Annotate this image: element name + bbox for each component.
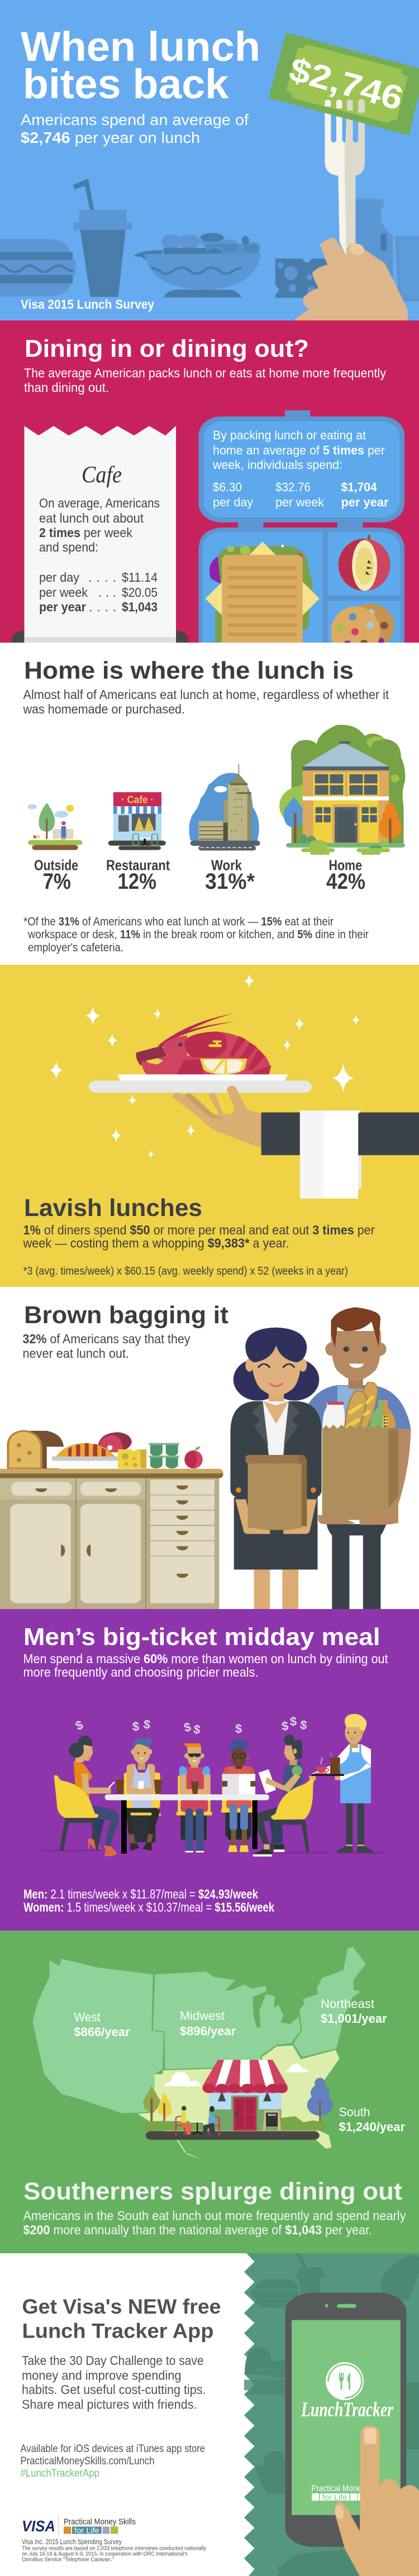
body text: [23, 1223, 375, 1251]
region: midwest: $896/year: [180, 2024, 236, 2038]
stat: outside: Outside: [34, 856, 78, 873]
spend comparison: [23, 1887, 274, 1914]
icon: hand tapping: [334, 2426, 419, 2576]
lunchbox lid text: home an average of 5 times per: [213, 443, 385, 457]
heading: Dining in or dining out?: [25, 335, 309, 362]
subtitle: [21, 111, 249, 146]
icon: dollar signs: $: [142, 1717, 151, 1732]
icon: dollar signs: [73, 1715, 308, 1737]
receipt text: . . .: [98, 585, 116, 600]
intro text: than dining out.: [24, 380, 109, 395]
footnote: employer's cafeteria.: [28, 941, 123, 954]
icon: dollar signs: $: [183, 1720, 192, 1735]
footnote: *Of the 31% of Americans who eat lunch at work — 15% eat at their: [23, 916, 334, 928]
region: south: [339, 2105, 405, 2134]
source note: [22, 2538, 207, 2563]
phone brand text: Practical Mone: [312, 2484, 361, 2493]
heading: Southerners splurge dining out: [23, 2177, 402, 2205]
stat: home: 42%: [326, 869, 365, 894]
intro text: [24, 366, 386, 395]
illustration: diners left: [42, 1736, 212, 1856]
region: northeast: [321, 1996, 387, 2026]
heading: Get Visa's NEW free: [22, 2295, 221, 2318]
panel: home is where the lunch is: [0, 643, 419, 965]
icon: groceries on counter: [8, 1431, 203, 1469]
footnote: workspace or desk, 11% in the break room or kitchen, and 5% dine in their: [27, 928, 369, 941]
spend comparison: Men: 2.1 times/week x $11.87/meal = $24.93/week: [23, 1887, 258, 1902]
region: west: [74, 2010, 130, 2039]
heading: Men’s big-ticket midday meal: [23, 1624, 380, 1650]
bill amount: $2,746: [285, 50, 407, 117]
lunchbox lid text: [212, 428, 389, 509]
heading: [22, 2295, 221, 2343]
icon: dollar signs: $: [281, 1718, 289, 1734]
stat: work: 31%*: [205, 869, 255, 894]
panel: men's midday meal: [0, 1609, 419, 1931]
footnote: [23, 916, 369, 954]
stat: outside: 7%: [42, 869, 71, 894]
cafe sign: · Cafe ·: [121, 794, 154, 805]
region: west: $866/year: [74, 2025, 130, 2039]
body text: 1% of diners spend $50 or more per meal and eat out 3 times per: [23, 1223, 375, 1237]
region: northeast: Northeast: [321, 1996, 374, 2011]
icon: lobster on tray: [89, 1014, 312, 1093]
availability text: PracticalMoneySkills.com/Lunch: [20, 2455, 154, 2467]
icon: kitchen counter: [0, 1469, 223, 1610]
icon: fork tips and hand: [294, 99, 408, 320]
intro text: Almost half of Americans eat lunch at home, regardless of whether it: [23, 687, 389, 702]
icon: dollar signs: $: [192, 1722, 202, 1737]
app logo: [326, 2362, 364, 2400]
body text: [23, 2209, 406, 2237]
lunchbox lid text: $6.30: [213, 480, 242, 494]
source note: Visa Inc. 2015 Lunch Spending Survey: [22, 2538, 122, 2546]
intro text: [23, 687, 389, 716]
receipt text: $11.14: [122, 570, 158, 585]
Visa logo: for Life: [74, 2526, 99, 2535]
illustration: diners right and waiter: [221, 1714, 388, 1856]
table: [105, 1794, 269, 1854]
panel: hero: [0, 0, 419, 321]
icon: restaurant: [108, 792, 166, 850]
body text: money and improve spending: [22, 2368, 181, 2383]
body text: week — costing them a whopping $9,383* a year.: [23, 1236, 289, 1251]
body text: [22, 1332, 191, 1361]
illustration: woman with paper bag: [230, 1328, 322, 1610]
Visa logo: VISA: [22, 2517, 55, 2535]
source line: Visa 2015 Lunch Survey: [21, 297, 154, 312]
phone: [285, 2292, 406, 2547]
heading: Brown bagging it: [24, 1301, 228, 1329]
source note: on July 16-19 & August 6-9, 2015, in cooperation with ORC International's: [22, 2550, 188, 2557]
heading: Home is where the lunch is: [24, 657, 354, 684]
icon: home: [279, 725, 405, 855]
receipt text: [39, 496, 160, 614]
subtitle: Americans spend an average of: [21, 111, 249, 128]
receipt text: On average, Americans: [39, 496, 160, 510]
body text: Take the 30 Day Challenge to save: [22, 2353, 203, 2368]
stat: restaurant: [106, 856, 170, 894]
Visa logo: Practical Money Skills: [64, 2517, 136, 2527]
region: midwest: Midwest: [180, 2009, 225, 2023]
source note: The survey results are based on 2,033 telephone interviews conducted nationally: [22, 2545, 207, 2551]
apple: [339, 535, 391, 591]
panel: brown bagging: [0, 1287, 419, 1610]
heading: Lunch Tracker App: [22, 2319, 213, 2343]
receipt text: per day: [39, 570, 79, 585]
receipt text: 2 times per week: [39, 525, 132, 540]
panel: lavish lunches: [0, 965, 419, 1287]
subtitle: $2,746 per year on lunch: [21, 129, 200, 146]
body text: more frequently and choosing pricier meals.: [23, 1665, 258, 1679]
stat: home: Home: [328, 856, 362, 873]
phone brand bar: for Life: [322, 2493, 347, 2502]
region: south: $1,240/year: [339, 2120, 405, 2134]
title: When lunch: [21, 23, 260, 70]
map of US regions: [32, 1947, 366, 2159]
body text: [22, 2353, 206, 2412]
body text: Men spend a massive 60% more than women on lunch by dining out: [23, 1651, 388, 1666]
Visa logo: [22, 2516, 136, 2536]
body text: Americans in the South eat lunch out more frequently and spend nearly: [23, 2209, 406, 2223]
body text: never eat lunch out.: [22, 1346, 129, 1361]
icon: dollar signs: $: [299, 1717, 308, 1732]
stat: restaurant: 12%: [117, 869, 156, 894]
receipt text: and spend:: [39, 540, 98, 554]
icon: dollar signs: $: [73, 1717, 85, 1733]
lunchbox lid text: per year: [341, 495, 389, 509]
icon: sparkles: [49, 974, 360, 1159]
illustration: man with grocery bag: [307, 1307, 411, 1610]
cafe script: Cafe: [82, 462, 122, 488]
lunchbox lid text: per day: [213, 495, 253, 509]
stat: restaurant: Restaurant: [106, 856, 170, 873]
footnote: *3 (avg. times/week) x $60.15 (avg. weekly spend) x 52 (weeks in a year): [23, 1265, 348, 1277]
panel: southerners splurge: [0, 1931, 419, 2253]
icon: outside: [27, 803, 82, 850]
icon: waiter hand and sleeve: [173, 1086, 419, 1199]
lunchbox: [199, 410, 404, 657]
icon: food silhouettes: [0, 179, 419, 310]
zigzag teal background with food silhouettes: [244, 2253, 419, 2576]
intro text: was homemade or purchased.: [23, 702, 185, 716]
body text: [23, 1651, 388, 1679]
phone brand bar: [312, 2493, 364, 2502]
region: south: South: [339, 2105, 370, 2119]
body text: 32% of Americans say that they: [22, 1332, 191, 1346]
intro text: The average American packs lunch or eats at home more frequently: [24, 366, 386, 380]
body text: Share meal pictures with friends.: [22, 2397, 197, 2412]
lunchbox lid text: week, individuals spend:: [212, 458, 342, 472]
panel: dining in or out: [0, 320, 419, 657]
receipt text: per year: [39, 600, 86, 614]
panel: lunch tracker app: [0, 2253, 419, 2576]
menu board text: MENU: [268, 2114, 277, 2117]
heading: Lavish lunches: [24, 1194, 202, 1222]
region: northeast: $1,001/year: [321, 2012, 387, 2026]
body text: $200 more annually than the national average of $1,043 per year.: [23, 2223, 372, 2237]
region: midwest: [180, 2009, 236, 2038]
lunchbox lid text: per week: [275, 495, 325, 509]
receipt text: . . . .: [88, 570, 116, 585]
receipt text: per week: [39, 585, 88, 600]
receipt text: $20.05: [122, 585, 158, 600]
sandwich: [205, 542, 320, 656]
lunchbox lid text: $1,704: [341, 480, 377, 494]
body text: habits. Get useful cost-cutting tips.: [22, 2382, 206, 2397]
lunchbox lid text: By packing lunch or eating at: [213, 428, 366, 442]
icon: work: [189, 764, 260, 851]
icon: restaurant scene: [143, 2060, 333, 2140]
region: west: West: [74, 2010, 101, 2024]
icon: dollar signs: $: [290, 1715, 297, 1728]
receipt text: . . . .: [89, 600, 116, 614]
stat: work: [205, 856, 255, 894]
availability text: [20, 2443, 205, 2479]
title line 2: bites back: [23, 61, 229, 107]
spend comparison: Women: 1.5 times/week x $10.37/meal = $15.56/week: [23, 1900, 274, 1914]
availability text: Available for iOS devices at iTunes app store: [20, 2443, 205, 2455]
icon: dollar signs: $: [235, 1722, 242, 1736]
source note: Omnibus Service “Telephone Caravan.”: [22, 2556, 114, 2563]
lunchbox lid text: $32.76: [275, 480, 311, 494]
icon: dollar signs: $: [132, 1720, 139, 1734]
receipt: [12, 426, 188, 643]
availability text: #LunchTrackerApp: [20, 2468, 99, 2479]
receipt text: eat lunch out about: [39, 511, 144, 525]
icon: fork with bill: [269, 32, 419, 275]
receipt text: $1,043: [122, 600, 158, 614]
stat: home: [326, 856, 365, 894]
stat: outside: [34, 856, 78, 894]
stat: work: Work: [211, 856, 242, 873]
cookies: [331, 604, 394, 657]
